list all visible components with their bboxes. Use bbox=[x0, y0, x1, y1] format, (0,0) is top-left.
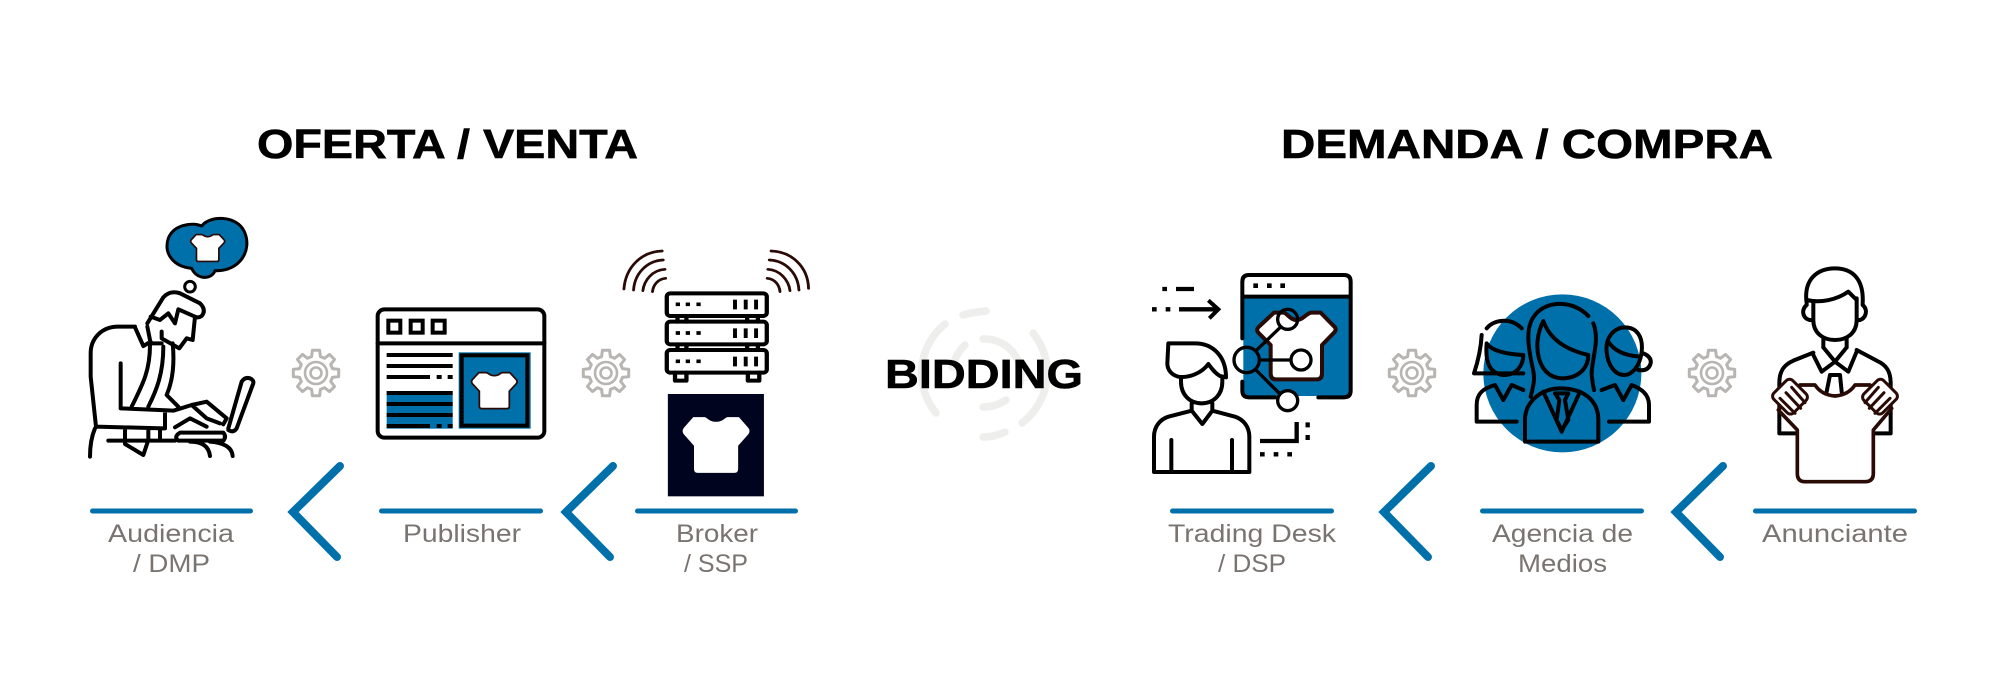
label: audiencia: Audiencia bbox=[108, 520, 234, 548]
publisher bar bbox=[379, 508, 543, 514]
icon: shirt in publisher bbox=[472, 373, 517, 409]
icon: gear 4 bbox=[1689, 350, 1735, 396]
right woman bbox=[1602, 327, 1651, 422]
icon: media agency team bbox=[1474, 294, 1651, 452]
blue circle bbox=[1483, 294, 1641, 452]
label: trading desk: / DSP bbox=[1218, 550, 1286, 578]
heading: bidding: BIDDING bbox=[885, 351, 1083, 397]
icon: advertiser holding shirt bbox=[1771, 268, 1899, 482]
shirt held bbox=[1778, 385, 1892, 482]
title: demanda / compra: DEMANDA / COMPRA bbox=[1281, 121, 1773, 167]
broker bar bbox=[635, 508, 798, 514]
chevron arrow 3 bbox=[1384, 466, 1431, 557]
dashes and arrow bbox=[1152, 289, 1308, 454]
main woman bbox=[1525, 304, 1598, 442]
label: agencia de medios: Medios bbox=[1518, 550, 1607, 578]
left woman bbox=[1474, 321, 1523, 422]
network nodes bbox=[1234, 309, 1311, 411]
label: trading desk: Trading Desk bbox=[1168, 520, 1337, 548]
person outline bbox=[90, 292, 253, 457]
person bbox=[1154, 343, 1249, 472]
label: broker: Broker bbox=[676, 520, 758, 548]
label: audiencia: / DMP bbox=[133, 550, 210, 578]
icon: gear 3 bbox=[1389, 350, 1435, 396]
navy square bbox=[668, 394, 764, 496]
icon: shirt in thought bbox=[191, 235, 225, 261]
label: agencia de medios: Agencia de bbox=[1492, 520, 1633, 548]
icon: gear 2 bbox=[583, 350, 629, 396]
hands bbox=[1771, 377, 1899, 416]
chevron arrow 2 bbox=[566, 466, 613, 557]
icon: publisher browser window bbox=[378, 309, 544, 438]
publisher blue ad panel bbox=[459, 352, 531, 429]
label: broker: / SSP bbox=[684, 550, 748, 578]
thought bubble bbox=[185, 281, 195, 292]
person bbox=[1779, 268, 1891, 433]
wifi arcs bbox=[624, 251, 809, 292]
icon: audience person with laptop and thought cloud bbox=[90, 218, 253, 457]
advertiser bar bbox=[1753, 508, 1917, 514]
icon: bidding rings bbox=[922, 311, 1047, 437]
browser outline bbox=[1242, 275, 1351, 397]
audience bar bbox=[90, 508, 253, 514]
label: publisher: Publisher bbox=[403, 520, 521, 548]
chevron arrow 1 bbox=[293, 466, 340, 557]
browser blue area bbox=[1243, 297, 1349, 396]
title: oferta / venta: OFERTA / VENTA bbox=[257, 121, 638, 167]
icon: thought cloud bbox=[167, 218, 247, 277]
icon: gear 1 bbox=[293, 350, 339, 396]
icon: network shirt bbox=[1257, 313, 1336, 379]
agency bar bbox=[1480, 508, 1644, 514]
icon: broker server rack with wifi and shirt bbox=[624, 251, 809, 496]
chevron arrow 4 bbox=[1676, 466, 1723, 557]
icon: white shirt bbox=[683, 417, 750, 473]
server units bbox=[667, 293, 767, 381]
icon: trading desk person with browser and network bbox=[1152, 275, 1351, 472]
label: anunciante: Anunciante bbox=[1762, 520, 1908, 548]
trading desk bar bbox=[1170, 508, 1334, 514]
